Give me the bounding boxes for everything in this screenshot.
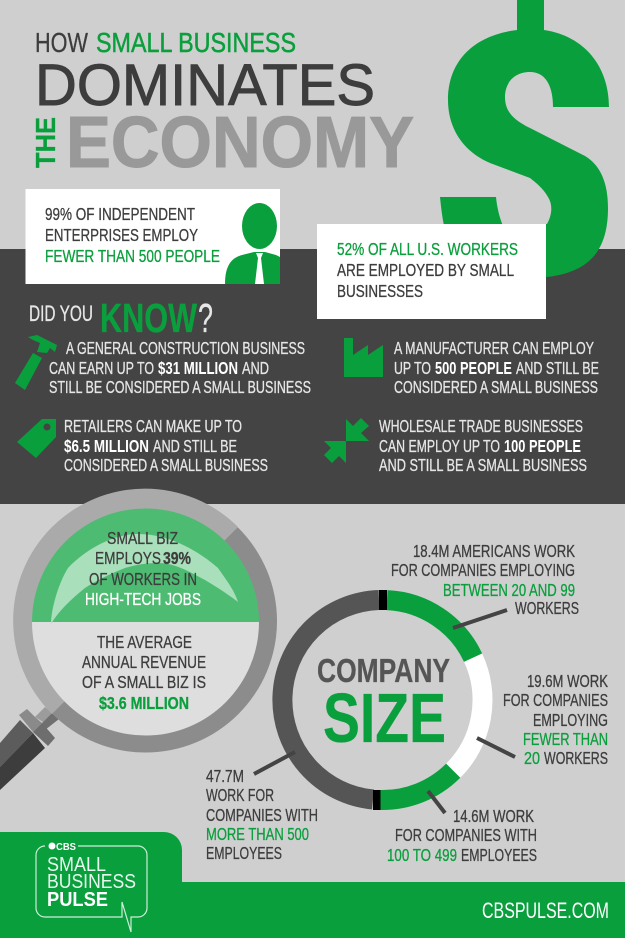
label: 19.6M: 20 (524, 748, 540, 768)
fact: retailers (17, 416, 268, 475)
text: high-tech jobs: SMALL BIZ (107, 528, 178, 548)
callout: 52 percent: 52% OF ALL U.S. WORKERS (337, 239, 518, 259)
text: average revenue: OF A SMALL BIZ IS (82, 672, 206, 692)
segment: 18.4M (387, 600, 473, 658)
label: 47.7M: COMPANIES WITH (206, 805, 318, 825)
label: 14.6M: EMPLOYEES (461, 845, 537, 865)
heading: did you know: DID YOU (29, 301, 93, 326)
text: high-tech jobs: EMPLOYS (95, 548, 161, 568)
logo: small business pulse: CBS (56, 841, 76, 853)
title: SMALL BUSINESS (96, 27, 296, 58)
fact: retailers: $6.5 MILLION (64, 436, 149, 456)
logo: small business pulse: SMALL (47, 854, 106, 876)
label: 14.6M: 100 TO 499 (387, 845, 457, 865)
text: high-tech jobs: HIGH-TECH JOBS (85, 589, 201, 609)
callout: 52 percent: ARE EMPLOYED BY SMALL (337, 260, 514, 280)
heading: did you know: ? (198, 295, 213, 341)
callout: 99 percent: FEWER THAN 500 PEOPLE (45, 246, 220, 266)
label: 47.7M: MORE THAN 500 (206, 824, 309, 844)
fact: manufacturer: UP TO (394, 358, 431, 378)
fact: wholesale: 100 PEOPLE (504, 436, 581, 456)
title: THE (30, 117, 61, 168)
text: high-tech jobs (85, 528, 201, 609)
label: 47.7M: 47.7M (206, 766, 244, 786)
magnifying glass (0, 489, 277, 790)
fact: construction (15, 335, 311, 397)
text: average revenue: $3.6 MILLION (99, 693, 189, 713)
text: average revenue: THE AVERAGE (97, 632, 192, 652)
fact: construction: STILL BE CONSIDERED A SMALL BUSINESS (49, 377, 311, 397)
title: HOW (35, 27, 88, 58)
icon: businessperson (225, 203, 280, 284)
fact: retailers: CONSIDERED A SMALL BUSINESS (64, 455, 268, 475)
text: high-tech jobs: OF WORKERS IN (89, 569, 197, 589)
fact: construction: AND (242, 358, 269, 378)
fact: retailers: AND STILL BE (153, 436, 237, 456)
callout: 99 percent: 99% OF INDEPENDENT (45, 204, 195, 224)
fact: wholesale: CAN EMPLOY UP TO (379, 436, 500, 456)
fact: construction: $31 MILLION (158, 358, 238, 378)
fact: manufacturer: 500 PEOPLE (435, 358, 512, 378)
lens highlight (51, 534, 238, 624)
lens upper half (32, 508, 259, 622)
label: 18.4M: 18.4M AMERICANS WORK (413, 541, 575, 561)
logo: small business pulse: PULSE (47, 889, 108, 911)
label: 47.7M (206, 766, 318, 863)
label: 18.4M: BETWEEN 20 AND 99 (443, 580, 575, 600)
lens ring (13, 489, 277, 752)
icon: large dollar sign (440, 0, 609, 277)
text: high-tech jobs: 39% (163, 548, 191, 568)
footer band (0, 832, 625, 938)
text: average revenue: ANNUAL REVENUE (82, 652, 206, 672)
label: 18.4M (391, 541, 579, 618)
title: DOMINATES (35, 53, 375, 118)
segment: 14.6M (380, 771, 453, 800)
handle (0, 707, 59, 790)
logo: small business pulse: BUSINESS (47, 871, 136, 893)
label: 14.6M: FOR COMPANIES WITH (395, 825, 537, 845)
leader lines (254, 610, 515, 813)
icon: hammer (15, 335, 57, 390)
segment: 19.6M (453, 658, 482, 771)
fact: wholesale (324, 416, 587, 475)
label: 18.4M: WORKERS (515, 598, 579, 618)
text: average revenue (82, 632, 206, 713)
label: 47.7M: WORK FOR (206, 785, 274, 805)
center label: SIZE (323, 679, 446, 757)
icon: factory (344, 338, 383, 377)
lens lower half (32, 622, 259, 736)
icon: price tag (17, 419, 56, 458)
title: ECONOMY (66, 103, 414, 183)
donut chart: company size (282, 590, 482, 810)
center label (317, 652, 450, 757)
segment: 47.7M (282, 600, 379, 800)
label: 14.6M (387, 806, 537, 865)
title (30, 27, 414, 183)
center label: COMPANY (317, 652, 450, 689)
icon: converging arrows (324, 418, 369, 463)
label: 47.7M: EMPLOYEES (206, 843, 282, 863)
heading: did you know: KNOW (100, 295, 197, 341)
dividers (373, 590, 387, 810)
callout: 52 percent: BUSINESSES (337, 281, 423, 301)
callout: 52 percent (317, 224, 546, 319)
label: 19.6M (503, 671, 608, 768)
fact: manufacturer (344, 338, 599, 397)
logo: small business pulse (36, 841, 147, 932)
fact: retailers: RETAILERS CAN MAKE UP TO (64, 416, 242, 436)
label: 14.6M: 14.6M WORK (453, 806, 534, 826)
heading: did you know (29, 295, 213, 341)
callout: 99 percent (26, 189, 280, 284)
fact: construction: CAN EARN UP TO (49, 358, 154, 378)
fact: construction: A GENERAL CONSTRUCTION BUSINESS (66, 338, 305, 358)
callout: 99 percent: ENTERPRISES EMPLOY (45, 225, 198, 245)
